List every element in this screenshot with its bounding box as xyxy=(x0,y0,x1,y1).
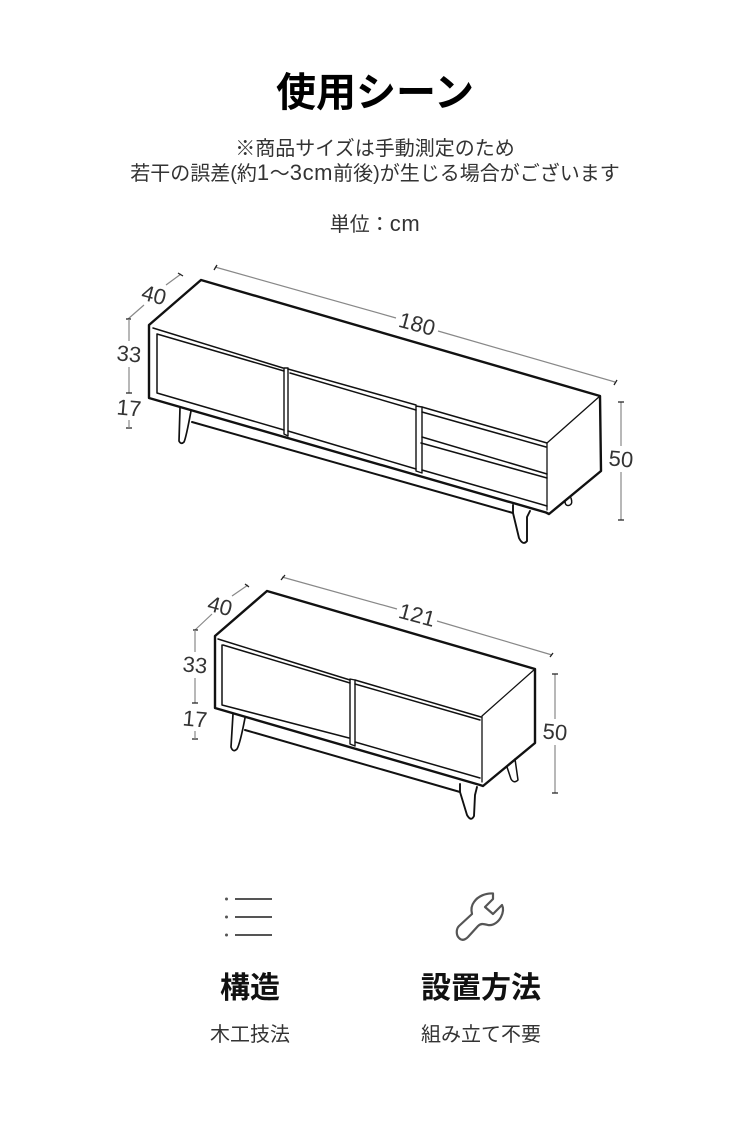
dimension: cabinet height 33: 33 xyxy=(116,340,142,368)
right leg xyxy=(460,784,477,819)
note text: ※商品サイズは手動測定のため xyxy=(235,138,515,160)
dimension: cabinet height 33 xyxy=(182,630,208,703)
dimension: width 121: 121 xyxy=(396,598,438,632)
dimension: depth 40: 40 xyxy=(205,591,235,621)
left leg xyxy=(179,408,191,443)
note text xyxy=(130,138,620,185)
diagram: 121cm TV stand xyxy=(182,575,568,819)
diagram: 180cm TV stand xyxy=(116,265,634,543)
dimension: width 180: 180 xyxy=(396,307,438,341)
dimension: total height 50: 50 xyxy=(542,718,568,746)
base rail xyxy=(245,730,460,792)
cabinet body xyxy=(149,280,601,514)
title: 使用シーン xyxy=(276,71,474,115)
dimension: total height 50 xyxy=(608,402,634,520)
base rail xyxy=(192,422,513,513)
heading: installation: 設置方法 xyxy=(421,972,541,1005)
icon: wrench xyxy=(457,893,503,940)
unit label: 単位：cm xyxy=(330,211,420,236)
dimension: cabinet height 33 xyxy=(116,319,142,393)
text: structure detail: 木工技法 xyxy=(210,1024,290,1046)
dimension: depth 40 xyxy=(193,584,249,630)
dimension: leg height 17: 17 xyxy=(182,705,208,733)
dimension: depth 40 xyxy=(126,273,183,319)
dimension: leg height 17: 17 xyxy=(116,394,142,422)
dimension: total height 50: 50 xyxy=(608,445,634,473)
text: installation detail: 組み立て不要 xyxy=(421,1024,541,1046)
dimension: cabinet height 33: 33 xyxy=(182,651,208,679)
back leg xyxy=(565,498,572,506)
right leg xyxy=(513,505,530,543)
left leg xyxy=(231,714,245,751)
dimension: total height 50 xyxy=(542,674,568,793)
dimension: depth 40: 40 xyxy=(139,280,169,310)
dimension: width 121 xyxy=(281,575,553,657)
heading: structure: 構造 xyxy=(220,972,280,1005)
dimension: width 180 xyxy=(214,265,617,385)
icon: list xyxy=(225,898,272,936)
cabinet body xyxy=(215,591,535,786)
note text: 若干の誤差(約1～3cm前後)が生じる場合がございます xyxy=(130,160,620,185)
back leg xyxy=(507,759,518,782)
